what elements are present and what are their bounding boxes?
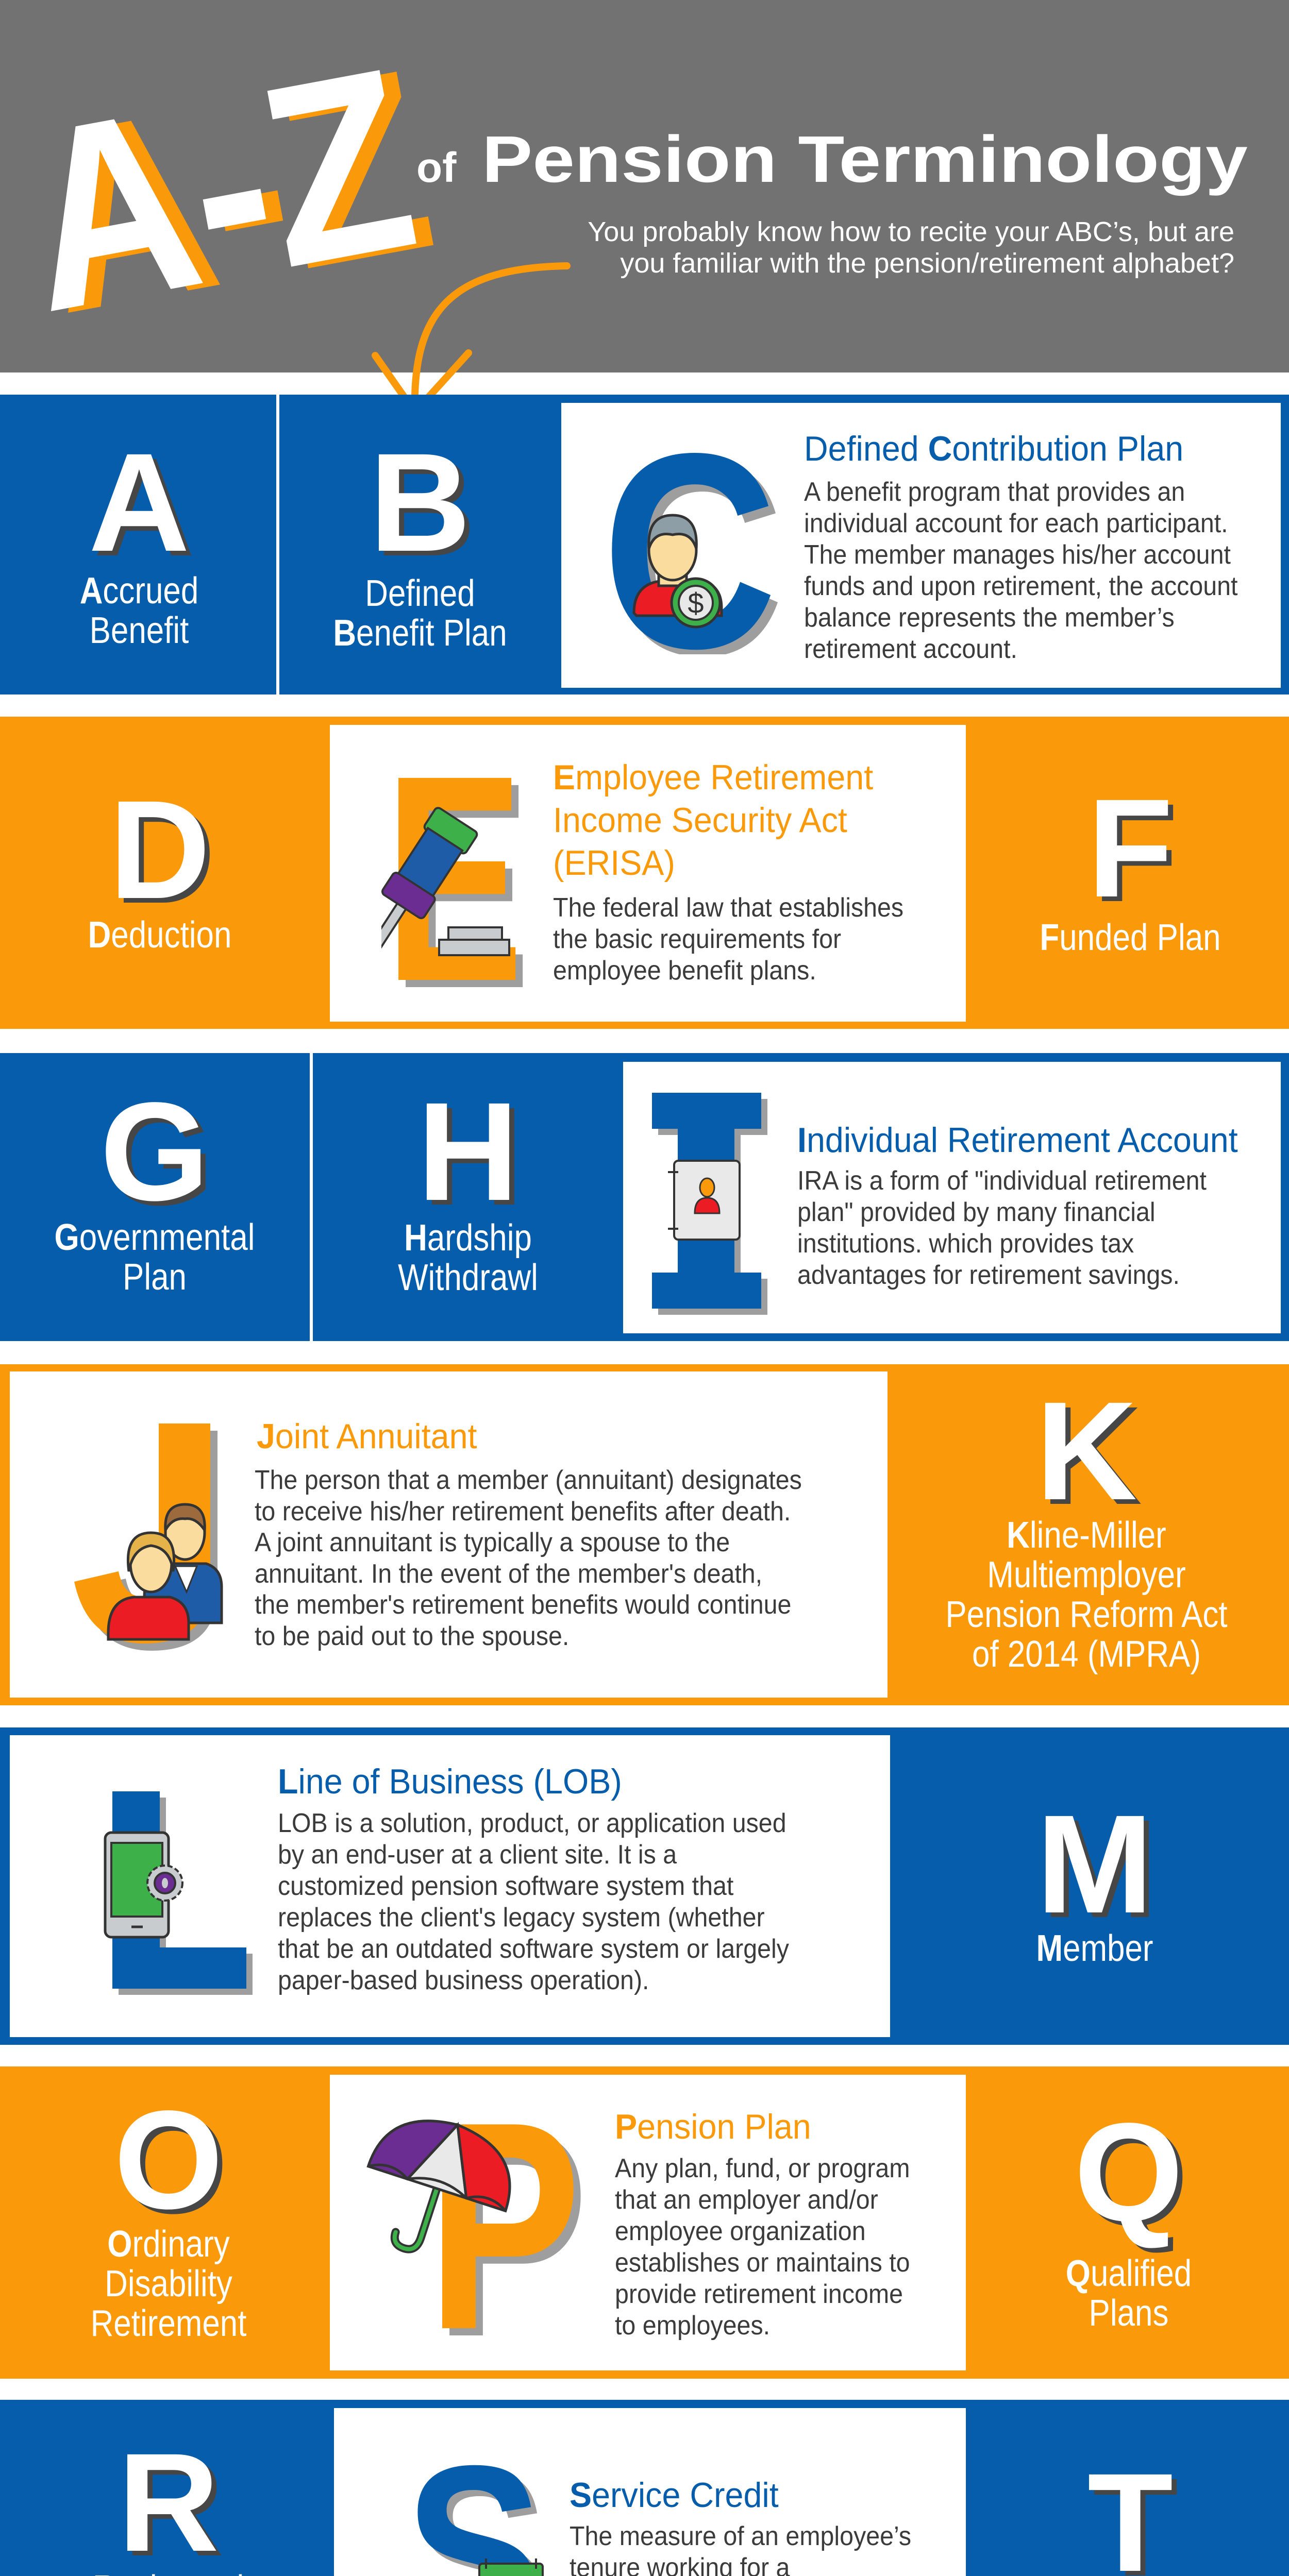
heading: Line of Business: Line of Business (LOB): [278, 1762, 622, 1801]
label H: Withdrawl: [398, 1257, 538, 1298]
text: L description: [278, 1808, 789, 1995]
letter A: A: [89, 424, 190, 581]
letter M: M: [1036, 1786, 1153, 1942]
text: E description: The federal law that establishes: [553, 893, 903, 923]
label A: Benefit: [90, 610, 189, 651]
text: E description: the basic requirements for: [553, 924, 841, 954]
text: I description: IRA is a form of "individual retirement: [797, 1166, 1207, 1196]
panel: A B C band: [0, 395, 1289, 694]
label F: Funded Plan: [1040, 917, 1221, 958]
text: J description: A joint annuitant is typically a spouse to the: [255, 1528, 730, 1557]
label H: [398, 1217, 538, 1298]
title: A-Z: A-Z: [3, 13, 433, 366]
text: I description: advantages for retirement savings.: [797, 1260, 1180, 1290]
title: of Pension Terminology: of: [416, 144, 456, 191]
text: J description: [255, 1465, 802, 1651]
label K: [945, 1515, 1228, 1675]
panel: J: [10, 1371, 888, 1698]
heading: Joint Annuitant: Joint Annuitant: [257, 1417, 477, 1456]
letter K: K: [1036, 1372, 1137, 1529]
panel: G H I band: [0, 1053, 1289, 1341]
panel: P: [330, 2075, 966, 2370]
icon: I with document: [652, 1093, 767, 1315]
label O: Ordinary: [107, 2224, 230, 2265]
heading: Service Credit: Service Credit: [570, 2476, 779, 2515]
text: J description: the member's retirement benefits would continue: [255, 1590, 791, 1620]
text: L description: replaces the client's legacy system (whether: [278, 1903, 765, 1933]
label O: [27, 2225, 310, 2344]
label H: Hardship: [404, 1217, 532, 1259]
label Q: [987, 2254, 1270, 2333]
label K: Multiemployer: [987, 1554, 1186, 1596]
label G: Governmental: [55, 1217, 255, 1258]
text: P description: provide retirement income: [615, 2279, 903, 2309]
text: J description: The person that a member (annuitant) designates: [255, 1465, 802, 1495]
letter R: R: [118, 2424, 219, 2576]
text: J description: to be paid out to the spouse.: [255, 1621, 569, 1651]
title: A-Z: A-Z: [20, 14, 450, 367]
letter H: H: [417, 1073, 518, 1230]
panel: R S T band: [0, 2400, 1289, 2576]
text: E description: employee benefit plans.: [553, 956, 816, 986]
text: P description: [615, 2153, 910, 2342]
label K: of 2014 (MPRA): [972, 1634, 1201, 1675]
icon: L with phone: [104, 1791, 253, 1995]
text: L description: customized pension software system that: [278, 1871, 733, 1901]
subtitle: You probably know how to recite your ABC’s, but are: [588, 216, 1234, 247]
panel: D E F band: [0, 717, 1289, 1029]
text: C description: balance represents the member’s: [804, 603, 1175, 633]
text: I description: institutions. which provides tax: [797, 1229, 1134, 1259]
letter F: F: [1087, 770, 1173, 926]
label A: Accrued: [80, 570, 198, 612]
text: S description: [570, 2521, 911, 2576]
text: J description: annuitant. In the event of the member's death,: [255, 1559, 762, 1589]
text: E description: [553, 893, 903, 986]
letter D: D: [109, 771, 210, 928]
label B: Benefit Plan: [333, 613, 507, 654]
text: C description: retirement account.: [804, 634, 1017, 664]
heading: ERISA: (ERISA): [553, 843, 675, 883]
letter G: G: [100, 1073, 209, 1230]
text: L description: paper-based business operation).: [278, 1965, 649, 1995]
label O: Retirement: [91, 2303, 246, 2344]
subtitle: [588, 216, 1234, 279]
heading: ERISA: [553, 758, 873, 883]
text: P description: that an employer and/or: [615, 2185, 878, 2215]
text: C description: individual account for each participant.: [804, 509, 1228, 538]
text: S description: The measure of an employee’s: [570, 2521, 911, 2551]
text: C description: [804, 477, 1238, 664]
text: P description: Any plan, fund, or program: [615, 2154, 910, 2183]
icon: J with couple: [74, 1423, 223, 1651]
text: I description: [797, 1166, 1207, 1290]
text: L description: by an end-user at a client site. It is a: [278, 1840, 677, 1870]
heading: ERISA: Income Security Act: [553, 801, 847, 840]
label O: Disability: [105, 2263, 232, 2304]
icon: C with person and coin: $: [688, 587, 704, 619]
panel: C: [561, 403, 1281, 688]
letter B: B: [370, 424, 471, 581]
header background: [0, 0, 1289, 372]
label B: Defined: [365, 573, 475, 614]
panel: L: [10, 1735, 890, 2037]
label M: Member: [1036, 1928, 1153, 1969]
label G: Plan: [123, 1257, 187, 1298]
panel: E: [330, 725, 966, 1022]
text: P description: employee organization: [615, 2216, 866, 2246]
panel: S: [334, 2408, 966, 2576]
letter Q: Q: [1074, 2094, 1183, 2250]
text: C description: funds and upon retirement, the account: [804, 571, 1237, 601]
label K: Pension Reform Act: [945, 1594, 1228, 1635]
label Q: Qualified: [1066, 2253, 1192, 2294]
label G: [55, 1217, 255, 1298]
text: C description: The member manages his/her account: [804, 540, 1231, 570]
label B: [333, 573, 507, 654]
panel: L M band: [0, 1727, 1289, 2045]
text: I description: plan" provided by many financial: [797, 1197, 1156, 1227]
text: J description: to receive his/her retirement benefits after death.: [255, 1496, 791, 1526]
label A: [80, 570, 198, 651]
label D: Deduction: [88, 914, 231, 956]
label Q: Plans: [1089, 2293, 1168, 2334]
arrow: header to B: [372, 262, 571, 395]
label K: Kline-Miller: [1007, 1515, 1166, 1556]
panel: I: [623, 1062, 1281, 1333]
text: P description: establishes or maintains to: [615, 2248, 910, 2278]
text: P description: to employees.: [615, 2311, 770, 2341]
title: of Pension Terminology: Pension Terminology: [482, 123, 1248, 196]
text: L description: LOB is a solution, product, or application used: [278, 1808, 786, 1838]
panel: J K band: [0, 1364, 1289, 1705]
text: C description: A benefit program that provides an: [804, 477, 1185, 507]
letter O: O: [114, 2081, 223, 2238]
heading: Individual Retirement Account: Individual Retirement Account: [797, 1121, 1238, 1160]
subtitle: you familiar with the pension/retirement alphabet?: [620, 248, 1234, 279]
heading: Defined Contribution Plan: Defined Contribution Plan: [804, 429, 1183, 468]
text: L description: that be an outdated software system or largely: [278, 1934, 789, 1964]
heading: ERISA: Employee Retirement: [553, 758, 873, 797]
panel: O P Q band: [0, 2066, 1289, 2379]
heading: Pension Plan: Pension Plan: [615, 2107, 811, 2146]
